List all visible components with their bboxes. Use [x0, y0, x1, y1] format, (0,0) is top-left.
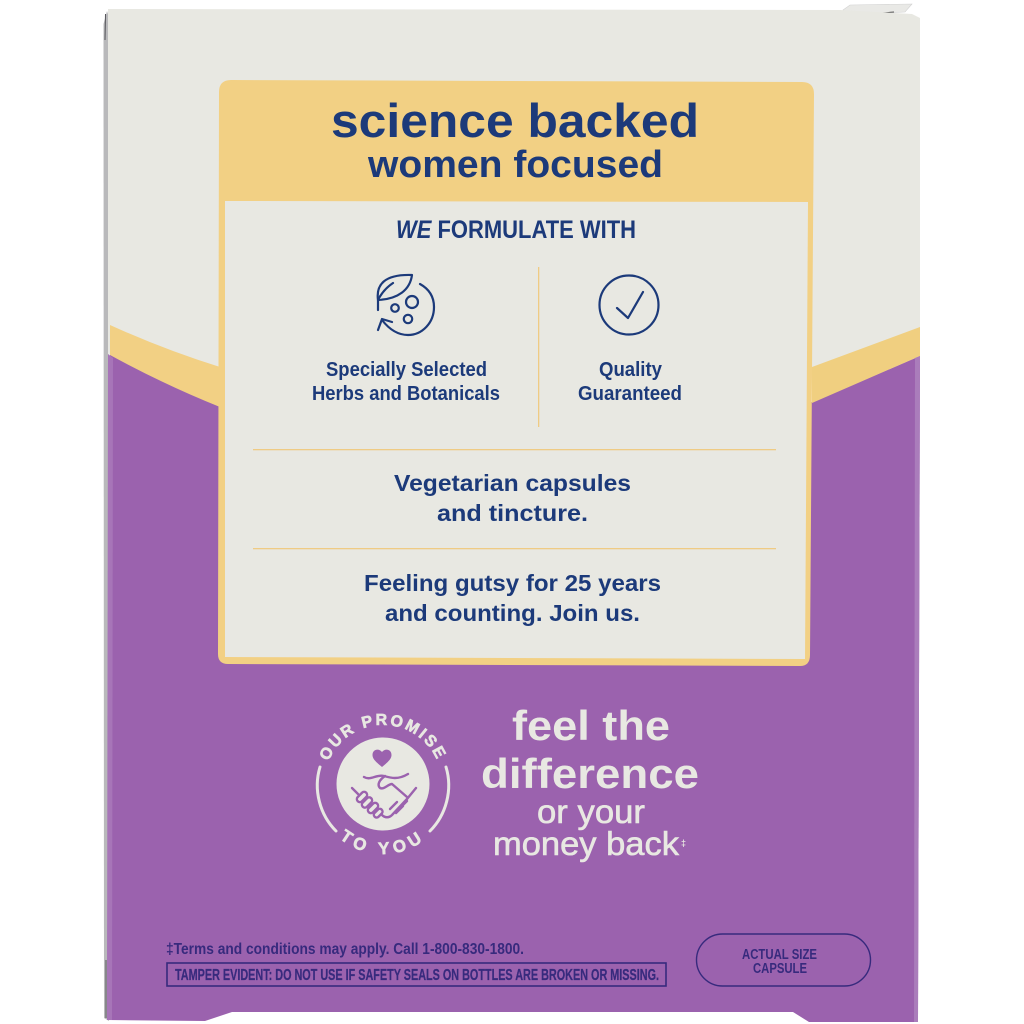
- badge ring text: OUR PROMISE: [320, 714, 446, 760]
- text: vegetarian capsules: [394, 470, 631, 526]
- icon: heart: [372, 750, 392, 767]
- right gold swoosh: [812, 327, 920, 403]
- tamper evident notice: [167, 963, 666, 986]
- icon: leaf and botanicals cycle: [378, 275, 434, 335]
- text: money back guarantee: feel the: [512, 702, 670, 749]
- tamper evident notice: TAMPER EVIDENT: DO NOT USE IF SAFETY SEALS ON BOTTLES ARE BROKEN OR MISSING.: [175, 967, 659, 984]
- divider vertical: [538, 267, 539, 427]
- heading: women focused: [367, 144, 663, 186]
- badge ring text: [320, 714, 446, 854]
- badge: our promise to you: [316, 714, 450, 854]
- label: quality guaranteed: Quality: [599, 359, 663, 381]
- side fold highlights: [107, 354, 920, 1022]
- heading: [331, 94, 699, 186]
- text: money back guarantee: ‡: [681, 838, 686, 848]
- actual size capsule: CAPSULE: [753, 961, 807, 977]
- icon: handshake: [352, 774, 416, 819]
- panel: science backed card: [218, 80, 814, 666]
- actual size capsule: [696, 934, 870, 986]
- text: feeling gutsy: Feeling gutsy for 25 years: [364, 570, 661, 596]
- badge disc: [336, 738, 430, 830]
- heading: science backed: [331, 94, 699, 147]
- box front: purple lower area: [107, 354, 920, 1022]
- actual size capsule: ACTUAL SIZE: [742, 947, 817, 963]
- text: feeling gutsy: and counting. Join us.: [385, 600, 640, 626]
- icon: check circle: [600, 276, 658, 334]
- box side edge: [104, 11, 110, 1021]
- text: terms and conditions: ‡Terms and conditions may apply. Call 1-800-830-1800.: [166, 941, 524, 958]
- text: vegetarian capsules: and tincture.: [437, 500, 588, 526]
- badge arcs: [317, 767, 449, 831]
- left gold swoosh: [110, 325, 220, 407]
- box front: cream upper area: [108, 9, 920, 380]
- text: money back guarantee: or your: [537, 793, 645, 830]
- label: herbs and botanicals: Herbs and Botanicals: [312, 383, 500, 405]
- text: money back guarantee: [481, 702, 699, 862]
- text: vegetarian capsules: Vegetarian capsules: [394, 470, 631, 496]
- text: feeling gutsy: [364, 570, 661, 626]
- label: herbs and botanicals: Specially Selected: [326, 359, 487, 381]
- panel cream body: [225, 201, 808, 659]
- label: quality guaranteed: [578, 359, 682, 405]
- label: herbs and botanicals: [312, 359, 500, 405]
- panel gold frame: [218, 80, 814, 666]
- text: money back guarantee: difference: [481, 750, 699, 797]
- subheading: we formulate with: WE FORMULATE WITH: [396, 216, 636, 244]
- box top flap: [843, 4, 912, 15]
- label: quality guaranteed: Guaranteed: [578, 383, 682, 405]
- text: money back guarantee: money back: [493, 825, 680, 862]
- badge ring text: TO YOU: [342, 828, 421, 854]
- divider upper: [253, 449, 776, 450]
- divider lower: [253, 548, 776, 549]
